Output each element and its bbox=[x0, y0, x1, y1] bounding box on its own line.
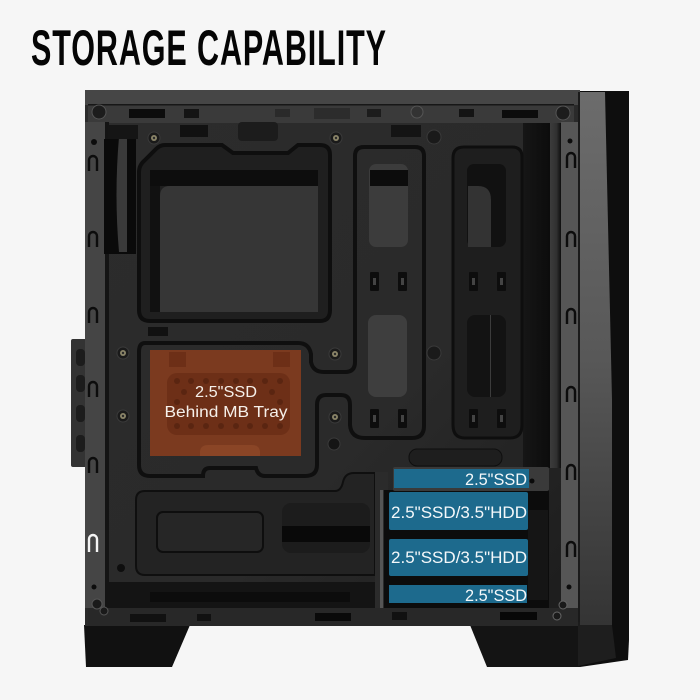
rear fan bbox=[104, 125, 138, 254]
left frame strip bbox=[85, 122, 109, 608]
callout label line 2: Behind MB Tray bbox=[164, 404, 288, 421]
tray embossed channel bbox=[139, 147, 424, 476]
top rails bbox=[85, 90, 580, 123]
drive slot 3: 2.5"SSD/3.5"HDD bbox=[391, 549, 527, 567]
centre column bbox=[368, 164, 408, 428]
front panel bbox=[578, 91, 629, 667]
bottom rail bbox=[88, 582, 578, 626]
drive slot 1: 2.5"SSD bbox=[465, 471, 527, 489]
callout: SSD behind MB tray bbox=[150, 350, 301, 456]
drive slot 3 bbox=[389, 539, 528, 576]
drive slot 4 bbox=[389, 585, 527, 605]
drive cage bbox=[375, 467, 549, 608]
callout label line 1: 2.5"SSD bbox=[195, 384, 257, 401]
right frame strip bbox=[561, 92, 580, 622]
drive slot 1 bbox=[394, 469, 529, 489]
title: STORAGE CAPABILITY bbox=[31, 20, 387, 76]
left side tabs bbox=[71, 339, 87, 467]
right vent mesh bbox=[523, 122, 550, 468]
right column bbox=[453, 147, 522, 438]
case interior bbox=[85, 90, 580, 626]
drive slot 2: 2.5"SSD/3.5"HDD bbox=[391, 504, 527, 522]
left foot bbox=[84, 625, 190, 667]
top-left cutout bbox=[139, 145, 330, 321]
lower shroud panel bbox=[117, 449, 502, 575]
standoffs and top clips bbox=[117, 122, 441, 450]
drive slot 4: 2.5"SSD bbox=[465, 587, 527, 605]
right foot and front panel base bbox=[470, 625, 580, 667]
drive slot 2 bbox=[389, 492, 528, 530]
